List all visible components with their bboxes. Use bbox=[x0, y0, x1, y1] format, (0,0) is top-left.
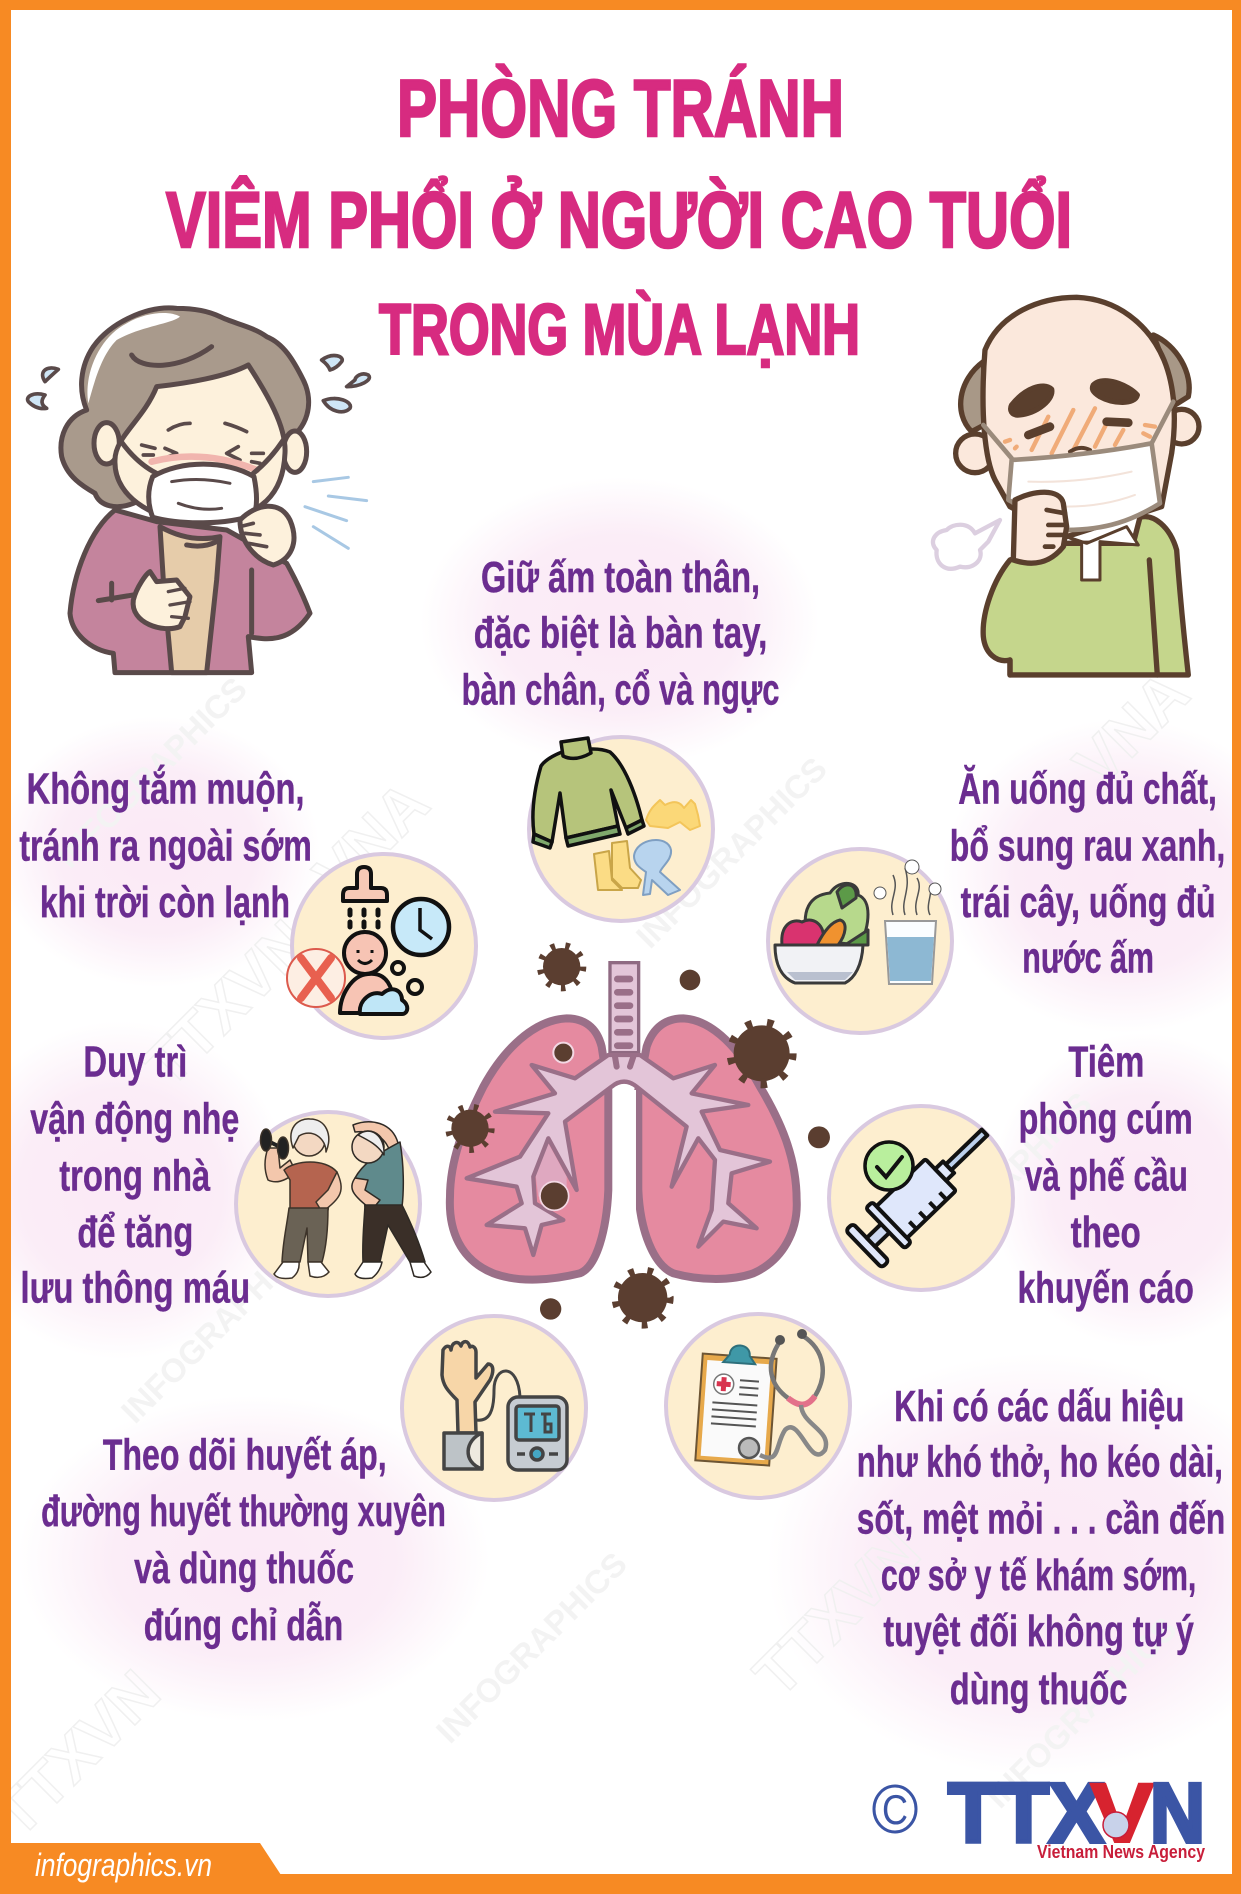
circle: bath timing bbox=[287, 854, 476, 1038]
title: TRONG MÙA LẠNH bbox=[379, 291, 860, 370]
trachea bbox=[610, 963, 639, 1053]
logo: TTXVN Vietnam News Agency: N bbox=[1150, 1766, 1205, 1860]
text: nutrition advice: nước ấm bbox=[1022, 935, 1154, 983]
icon: scarf bbox=[634, 840, 680, 895]
icon: vegetables and fruit bowl bbox=[775, 883, 868, 983]
left lung bbox=[450, 1018, 608, 1280]
text: seek medical care advice bbox=[857, 1383, 1225, 1714]
title: PHÒNG TRÁNH bbox=[397, 63, 844, 154]
icon: check badge bbox=[865, 1142, 913, 1190]
text: bathing advice bbox=[19, 764, 312, 927]
icon: sweater bbox=[533, 738, 644, 848]
text: keep warm: đặc biệt là bàn tay, bbox=[474, 610, 767, 658]
illustration: coughing elderly man bbox=[933, 297, 1199, 675]
text: VNA bbox=[611, 1099, 752, 1240]
icon: elderly woman lifting dumbbell bbox=[260, 1119, 341, 1278]
logo: TTXVN Vietnam News Agency: V bbox=[1090, 1766, 1154, 1860]
text: vaccination advice bbox=[1017, 1039, 1194, 1313]
text: exercise advice: lưu thông máu bbox=[21, 1265, 250, 1313]
text: monitoring advice: đường huyết thường xuyên bbox=[41, 1488, 446, 1536]
text: bathing advice: tránh ra ngoài sớm bbox=[19, 822, 312, 870]
text: bathing advice: Không tắm muộn, bbox=[27, 764, 305, 814]
text: INFOGRAPHICS bbox=[49, 670, 254, 875]
circle: healthy food bbox=[768, 849, 952, 1033]
icon: glass of warm water bbox=[874, 860, 941, 984]
text: TTXVN bbox=[131, 907, 324, 1100]
icon: syringe bbox=[844, 1112, 1004, 1269]
icon: socks bbox=[594, 841, 641, 890]
icon: hand and cuff bbox=[442, 1342, 493, 1469]
icon: digital monitor bbox=[508, 1397, 567, 1470]
text: exercise advice: vận động nhẹ bbox=[30, 1095, 239, 1143]
icon: shower head bbox=[343, 867, 387, 901]
text: INFOGRAPHICS bbox=[979, 1610, 1184, 1815]
text: exercise advice: để tăng bbox=[77, 1209, 193, 1257]
text: INFOGRAPHICS bbox=[894, 1085, 1099, 1290]
text: keep warm bbox=[462, 554, 779, 714]
virus particles bbox=[449, 946, 830, 1324]
copyright symbol: C bbox=[882, 1786, 908, 1833]
text: exercise advice bbox=[21, 1039, 250, 1313]
logo: TTXVN Vietnam News Agency bbox=[948, 1766, 1205, 1862]
text: VNA bbox=[1061, 659, 1202, 800]
text: vaccination advice: Tiêm bbox=[1068, 1039, 1144, 1087]
icon: bathing child bbox=[340, 932, 422, 1014]
right lung bbox=[638, 1018, 797, 1279]
text: keep warm: bàn chân, cổ và ngực bbox=[462, 666, 779, 714]
text: monitoring advice: Theo dõi huyết áp, bbox=[103, 1431, 387, 1479]
text: monitoring advice: đúng chỉ dẫn bbox=[144, 1600, 343, 1650]
logo: TTXVN Vietnam News Agency: TTX bbox=[948, 1766, 1104, 1860]
text: vaccination advice: theo bbox=[1071, 1209, 1141, 1257]
icon: clipboard bbox=[695, 1343, 777, 1466]
icon: clock bbox=[393, 899, 449, 955]
text: INFOGRAPHICS bbox=[114, 1225, 319, 1430]
illustration: lungs with virus particles bbox=[449, 946, 830, 1324]
bronchi bbox=[467, 1055, 770, 1255]
text: INFOGRAPHICS bbox=[629, 750, 834, 955]
text: VNA bbox=[301, 769, 442, 910]
text: monitoring advice: và dùng thuốc bbox=[134, 1545, 354, 1593]
footer tab: infographics.vn bbox=[35, 1847, 212, 1883]
circle: vaccination bbox=[829, 1106, 1013, 1290]
circle: medical checkup bbox=[666, 1314, 850, 1498]
text: exercise advice: Duy trì bbox=[83, 1039, 187, 1087]
icon: mittens bbox=[646, 800, 700, 830]
title bbox=[166, 63, 1072, 370]
logo: TTXVN Vietnam News Agency: Vietnam News Agency bbox=[1037, 1842, 1205, 1862]
illustration: coughing elderly woman bbox=[28, 308, 369, 673]
text: seek medical care advice: dùng thuốc bbox=[950, 1666, 1127, 1714]
text: INFOGRAPHICS bbox=[429, 1545, 634, 1750]
icon: red cross bbox=[287, 949, 345, 1007]
circle: warm clothes bbox=[529, 737, 713, 921]
footer tab bbox=[0, 1843, 281, 1883]
text: exercise advice: trong nhà bbox=[59, 1152, 211, 1200]
text: nutrition advice bbox=[950, 764, 1225, 983]
circle: blood pressure monitoring bbox=[402, 1316, 586, 1500]
text: bathing advice: khi trời còn lạnh bbox=[40, 879, 290, 927]
text: TTXVN bbox=[741, 1517, 934, 1710]
text: keep warm: Giữ ấm toàn thân, bbox=[481, 554, 760, 602]
text: monitoring advice bbox=[41, 1431, 446, 1650]
icon: tube bbox=[476, 1371, 520, 1420]
icon: stethoscope bbox=[739, 1329, 826, 1458]
circle: light exercise bbox=[236, 1112, 431, 1296]
icon: elderly man stretching bbox=[352, 1122, 431, 1278]
